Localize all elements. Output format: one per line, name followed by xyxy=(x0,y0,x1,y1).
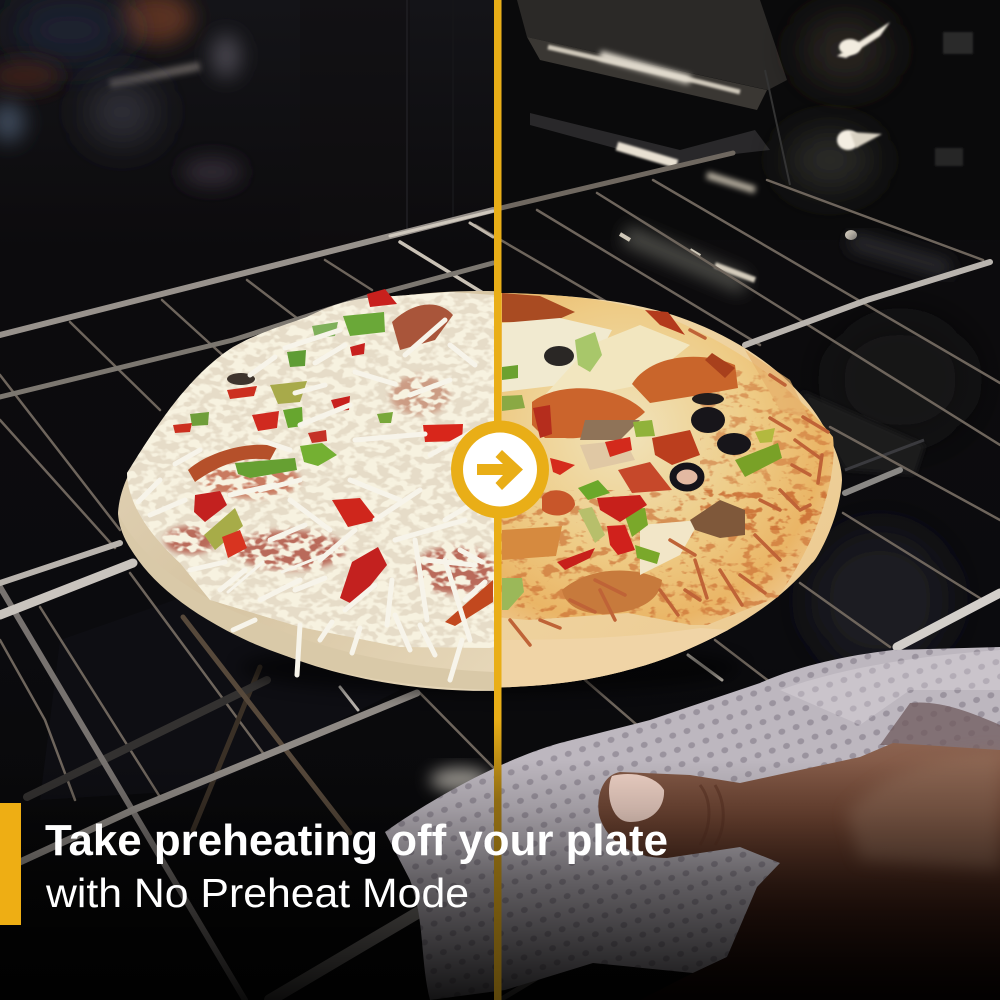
thumb nail xyxy=(609,774,664,822)
icon: right arrow xyxy=(477,450,523,490)
raw crust xyxy=(118,291,520,691)
pizza xyxy=(110,285,842,694)
kitchen towel xyxy=(385,647,1000,1000)
divider line xyxy=(494,0,502,1000)
baked crust xyxy=(480,293,842,688)
headline: Take preheating off your plate xyxy=(45,816,668,865)
olives xyxy=(544,346,751,488)
thumb knuckle creases xyxy=(700,785,723,845)
peppers xyxy=(575,332,602,372)
yellow accent block xyxy=(0,803,21,925)
baked half of pizza xyxy=(480,290,842,688)
pizza shadow xyxy=(240,642,740,694)
sausage xyxy=(690,500,745,538)
hand holding towel xyxy=(598,743,1000,1000)
palm highlight xyxy=(847,752,1000,870)
raw pizza toppings xyxy=(173,289,493,626)
baked cheese surface xyxy=(494,290,839,625)
browned cheese patches xyxy=(562,571,662,614)
bottom dark gradient overlay xyxy=(0,760,1000,1000)
raw half of pizza xyxy=(110,285,520,691)
oven wall panels and reflections, right side xyxy=(517,0,973,285)
mozzarella shreds xyxy=(138,320,485,680)
raw cheese surface xyxy=(110,285,500,655)
browned shreds on rim xyxy=(510,330,828,645)
circular arrow badge xyxy=(451,420,549,518)
back rack wires xyxy=(0,180,1000,815)
subheading: with No Preheat Mode xyxy=(45,870,469,916)
